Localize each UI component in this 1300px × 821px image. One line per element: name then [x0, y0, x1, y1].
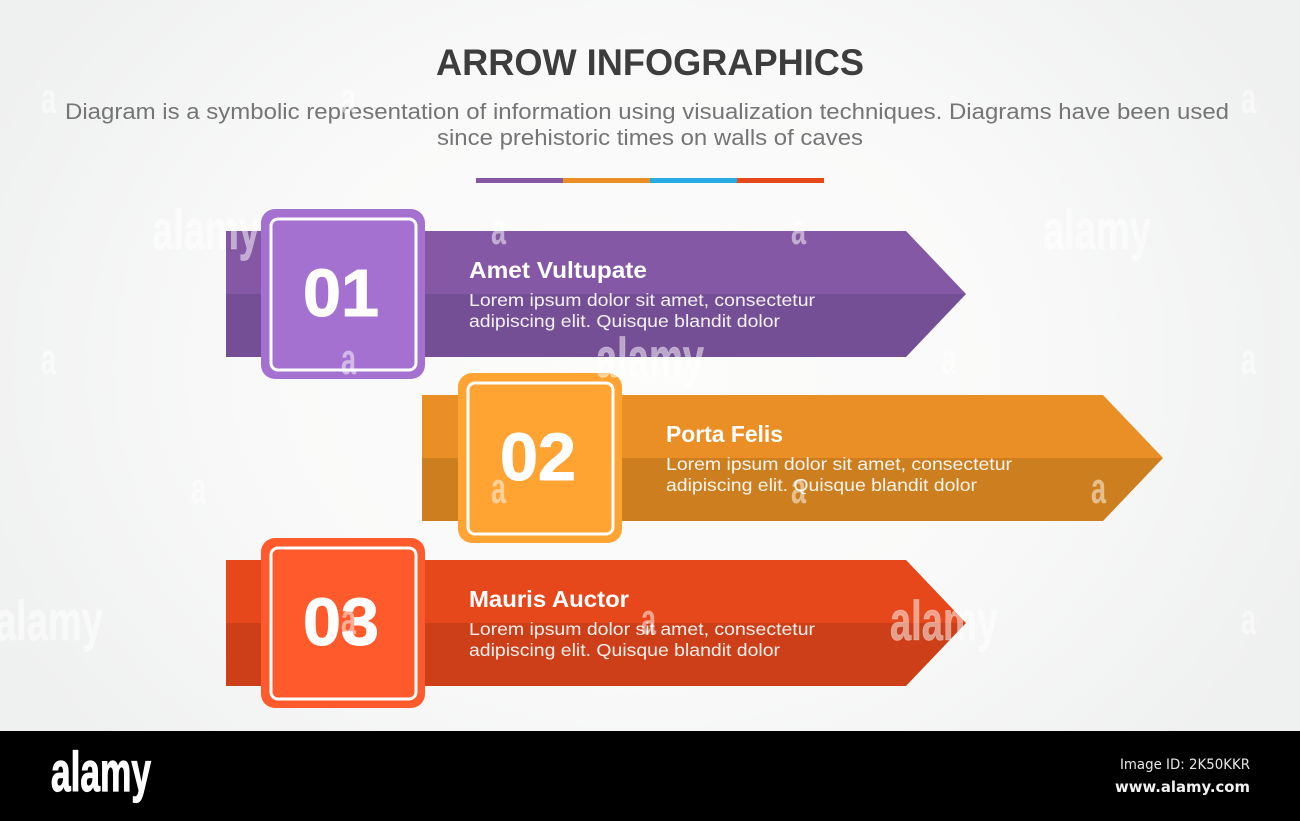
heading: Porta Felis: Porta Felis: [666, 421, 783, 447]
watermarks: [0, 74, 1256, 652]
number badge 01: [261, 209, 425, 379]
website: www.alamy.com: [1115, 778, 1250, 796]
watermarks: a: [491, 464, 506, 513]
heading: Mauris Auctor: Mauris Auctor: [469, 586, 629, 612]
watermarks: a: [341, 595, 356, 644]
body text 3: adipiscing elit. Quisque blandit dolor: [469, 640, 780, 660]
subtitle text: since prehistoric times on walls of caves: [437, 125, 863, 150]
arrow body 1: [226, 231, 966, 357]
watermarks: a: [41, 335, 56, 384]
body text 2: adipiscing elit. Quisque blandit dolor: [666, 475, 977, 495]
watermarks: a: [1241, 74, 1256, 123]
body text 3: Lorem ipsum dolor sit amet, consectetur: [469, 619, 815, 639]
number badge 02: [458, 373, 622, 543]
number badge 03: [261, 538, 425, 708]
colour divider: [476, 178, 824, 183]
image ID: Image ID: 2K50KKR: [1120, 757, 1250, 773]
number badge 03: 03: [303, 585, 379, 660]
watermarks: a: [1241, 335, 1256, 384]
arrow body 2: [422, 395, 1163, 521]
title: ARROW INFOGRAPHICS: [436, 42, 864, 83]
watermarks: a: [641, 595, 656, 644]
body text 1: Lorem ipsum dolor sit amet, consectetur: [469, 290, 815, 310]
watermarks: a: [1241, 595, 1256, 644]
watermarks: a: [791, 205, 806, 254]
panel: arrow 1: [226, 209, 966, 379]
number badge 01: 01: [303, 256, 379, 331]
watermarks: a: [41, 74, 56, 123]
arrow body 3: [226, 560, 966, 686]
watermarks: a: [191, 464, 206, 513]
watermarks: a: [1091, 464, 1106, 513]
watermarks: a: [341, 335, 356, 384]
number badge 02: 02: [500, 420, 576, 495]
watermarks: alamy: [596, 326, 704, 389]
panel: arrow 2: [422, 373, 1163, 543]
subtitle text: Diagram is a symbolic representation of information using visualization techniques. Diagrams have been used: [65, 99, 1229, 124]
heading: Amet Vultupate: Amet Vultupate: [469, 257, 647, 283]
watermarks: a: [491, 205, 506, 254]
watermarks: alamy: [152, 198, 260, 261]
subtitle text: [65, 99, 1229, 150]
body text 2: Lorem ipsum dolor sit amet, consectetur: [666, 454, 1012, 474]
body text 2: [666, 454, 1012, 495]
watermarks: a: [791, 464, 806, 513]
watermarks: a: [341, 74, 356, 123]
footer bar: [0, 731, 1300, 821]
footer logo: alamy: [51, 740, 151, 803]
watermarks: a: [941, 335, 956, 384]
watermarks: alamy: [1043, 198, 1151, 261]
body text 3: [469, 619, 815, 660]
watermarks: alamy: [890, 589, 998, 652]
body text 1: [469, 290, 815, 331]
panel: arrow 3: [226, 538, 966, 708]
body text 1: adipiscing elit. Quisque blandit dolor: [469, 311, 780, 331]
